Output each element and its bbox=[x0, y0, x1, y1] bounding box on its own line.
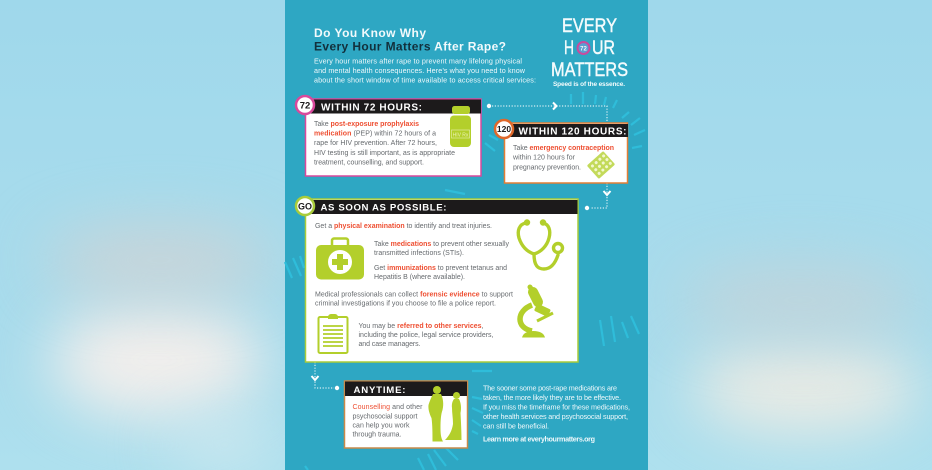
body text bbox=[314, 121, 455, 166]
closing text: If you miss the timeframe for these medications, bbox=[483, 402, 630, 412]
text: referred to other services: and case managers. bbox=[358, 341, 421, 348]
text: forensic evidence bbox=[315, 292, 513, 308]
text: immunizations bbox=[374, 265, 507, 281]
logo: every hour matters: Speed is of the essence. bbox=[553, 81, 625, 88]
heading text: AS SOON AS POSSIBLE: bbox=[320, 202, 446, 214]
closing text: other health services and psychosocial support, bbox=[483, 412, 628, 421]
text: medications: transmitted infections (STIs). bbox=[374, 250, 464, 257]
panel: anytime bbox=[344, 381, 468, 448]
heading: Do You Know Why bbox=[314, 26, 426, 40]
badge: 72: 72 bbox=[300, 100, 310, 112]
teal poster panel bbox=[285, 0, 648, 470]
icon: first aid kit bbox=[316, 238, 364, 280]
panel: as soon as possible bbox=[296, 197, 578, 362]
text: immunizations: Get immunizations to prevent tetanus and bbox=[374, 265, 507, 272]
intro text: about the short window of time available to access critical services: bbox=[314, 76, 536, 84]
badge: 72 bbox=[296, 96, 314, 114]
icon: contraceptive pill pack bbox=[587, 151, 615, 179]
body text: can help you work bbox=[352, 422, 410, 430]
heading: Every Hour Matters After Rape? bbox=[314, 40, 506, 54]
icon: HIV medicine bottle: HIV Rx bbox=[453, 132, 469, 138]
closing text bbox=[483, 384, 630, 444]
panel: within 120 hours bbox=[495, 120, 628, 183]
body text: rape for HIV prevention. After 72 hours, bbox=[314, 140, 437, 147]
text: medications bbox=[374, 241, 510, 257]
logo: every hour matters: UR bbox=[592, 37, 615, 59]
closing text: can still be beneficial. bbox=[483, 422, 549, 430]
heading bbox=[314, 26, 506, 54]
logo: every hour matters: H bbox=[564, 37, 574, 59]
body text: within 120 hours for bbox=[512, 154, 576, 162]
text: referred to other services: including the police, legal service providers, bbox=[358, 332, 494, 339]
icon: clipboard bbox=[318, 314, 348, 353]
logo: every hour matters bbox=[551, 15, 628, 88]
icon: HIV medicine bottle bbox=[450, 106, 471, 147]
icon: two standing people bbox=[428, 386, 462, 442]
heading text: ANYTIME: bbox=[354, 385, 406, 396]
body text bbox=[352, 404, 423, 438]
badge: 120: 120 bbox=[497, 124, 511, 134]
text: immunizations: Hepatitis B (where available). bbox=[374, 274, 465, 281]
connector: as soon as possible to anytime bbox=[312, 362, 339, 390]
body text: pregnancy prevention. bbox=[513, 164, 581, 172]
badge: go: GO bbox=[298, 202, 312, 212]
decorative rays bbox=[285, 92, 645, 470]
header bar bbox=[504, 124, 628, 137]
body text: treatment, counselling, and support. bbox=[314, 160, 424, 166]
closing text: taken, the more likely they are to be effective. bbox=[483, 393, 621, 402]
badge: go bbox=[296, 197, 314, 215]
text: referred to other services: You may be referred to other services, bbox=[358, 323, 484, 330]
intro text: and mental health consequences. Here’s what you need to know bbox=[314, 66, 526, 75]
icon: microscope bbox=[520, 287, 553, 338]
text: physical examination: Get a physical examination to identify and treat injuries. bbox=[315, 223, 492, 230]
connector: 120 hours to as soon as possible bbox=[585, 183, 610, 210]
body text: Take emergency contraception bbox=[513, 145, 614, 152]
body text: medication (PEP) within 72 hours of a bbox=[314, 130, 436, 138]
closing text: The sooner some post-rape medications are bbox=[483, 384, 617, 392]
heading text: WITHIN 72 HOURS: bbox=[321, 102, 422, 114]
text: referred to other services bbox=[358, 323, 494, 348]
logo: every hour matters: EVERY bbox=[562, 15, 617, 37]
header bar bbox=[305, 100, 481, 114]
text: forensic evidence: Medical professionals can collect forensic evidence to support bbox=[315, 292, 513, 298]
logo: every hour matters: MATTERS bbox=[551, 59, 628, 81]
body text: Take post-exposure prophylaxis bbox=[314, 121, 419, 128]
text: forensic evidence: criminal investigations if you choose to file a police report. bbox=[315, 300, 496, 308]
body text: Counselling and other bbox=[352, 404, 423, 411]
intro text bbox=[314, 56, 536, 84]
header bar bbox=[345, 382, 467, 396]
heading text: WITHIN 120 HOURS: bbox=[518, 126, 626, 138]
logo: every hour matters: 72 bbox=[580, 46, 587, 52]
body text: psychosocial support bbox=[352, 414, 418, 420]
connector: 72 hours to 120 hours bbox=[487, 102, 607, 123]
icon: stethoscope bbox=[518, 221, 562, 269]
body text: HIV testing is still important, as is appropriate bbox=[314, 150, 455, 157]
text: medications: Take medications to prevent other sexually bbox=[374, 241, 510, 248]
body text: through trauma. bbox=[352, 432, 402, 438]
intro text: Every hour matters after rape to prevent many lifelong physical bbox=[314, 56, 522, 66]
body text bbox=[512, 145, 614, 172]
closing text: Learn more at everyhourmatters.org bbox=[483, 434, 595, 444]
header bar bbox=[305, 200, 578, 214]
panel: within 72 hours bbox=[296, 96, 481, 176]
